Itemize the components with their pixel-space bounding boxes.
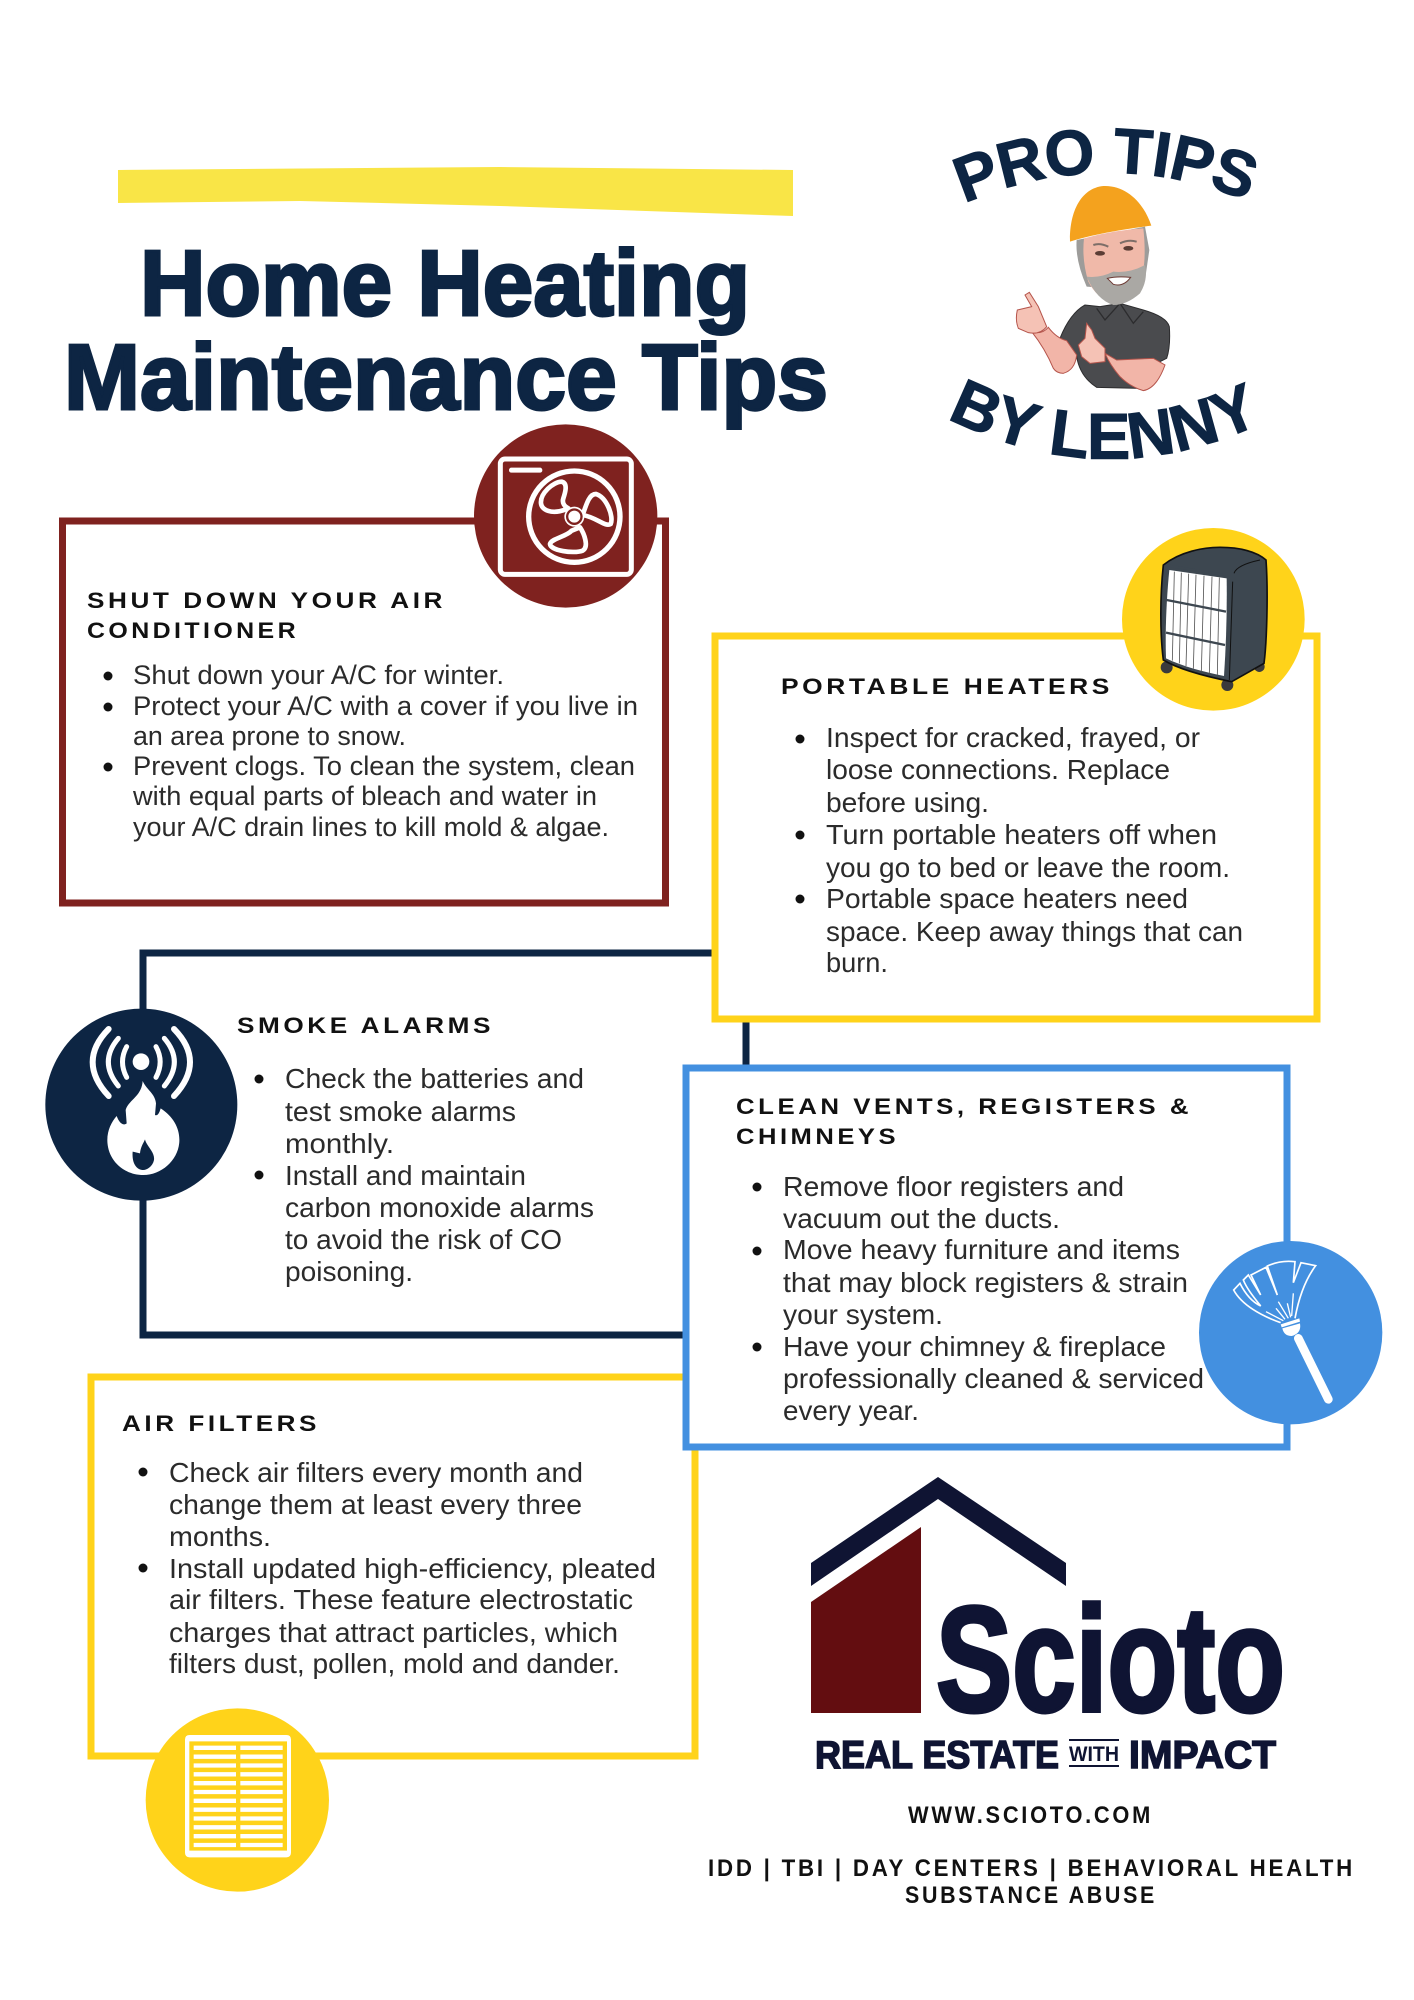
website url: WWW.SCIOTO.COM: [908, 1802, 1153, 1829]
bullet list: smoke alarms: to avoid the risk of CO: [285, 1224, 562, 1255]
bullet list: air conditioner: Shut down your A/C for winter.: [133, 660, 504, 690]
bullet list: smoke alarms: Check the batteries and: [285, 1063, 584, 1094]
bullet list: smoke alarms: poisoning.: [285, 1256, 413, 1287]
bullet list: air conditioner: Protect your A/C with a cover if you live in: [133, 691, 638, 721]
bullet list: portable heaters: before using.: [826, 787, 989, 818]
yellow highlight stroke: [118, 167, 793, 216]
bullet list: portable heaters: you go to bed or leave the room.: [826, 852, 1230, 883]
bullet list: smoke alarms: Install and maintain: [285, 1160, 526, 1191]
bullet list: air filters: Install updated high-efficiency, pleated: [169, 1553, 656, 1584]
bullet list: air filters: [138, 1457, 656, 1679]
bullet list: portable heaters: Inspect for cracked, frayed, or: [826, 722, 1200, 753]
heading: shut down your air conditioner: [87, 588, 446, 643]
logo: Scioto: [811, 1477, 1285, 1777]
heading: shut down your air conditioner: CONDITIONER: [87, 618, 299, 643]
bullet list: smoke alarms: monthly.: [285, 1128, 394, 1159]
service list: IDD | TBI | DAY CENTERS | BEHAVIORAL HEALTH: [708, 1855, 1355, 1882]
bullet list: smoke alarms: [254, 1063, 594, 1287]
title: Maintenance Tips: [64, 325, 828, 429]
title: [64, 231, 828, 429]
panel: air filters: [91, 1377, 695, 1892]
logo: pro tips by Lenny: [950, 128, 1256, 460]
icon: house roof and wall: [811, 1477, 1066, 1713]
panel: clean vents: [686, 1068, 1382, 1447]
tagline: IMPACT: [1129, 1734, 1276, 1777]
icon: portable heater: [1122, 528, 1305, 711]
bullet list: clean vents: your system.: [783, 1299, 943, 1330]
tagline: WITH: [1069, 1743, 1119, 1766]
panel: shut down your air conditioner: [62, 424, 666, 903]
service list: SUBSTANCE ABUSE: [905, 1882, 1157, 1909]
icon: feather duster: [1199, 1241, 1382, 1424]
bullet list: clean vents: Remove floor registers and: [783, 1171, 1124, 1202]
bullet list: clean vents: [752, 1171, 1204, 1426]
bullet list: air conditioner: Prevent clogs. To clean the system, clean: [133, 751, 635, 781]
heading: portable heaters: PORTABLE HEATERS: [781, 674, 1113, 699]
bullet list: air conditioner: your A/C drain lines to kill mold & algae.: [133, 812, 609, 842]
logo heading: by lenny: BY LENNY: [950, 378, 1248, 460]
service list: [708, 1855, 1355, 1909]
tagline: REAL ESTATE: [815, 1734, 1059, 1777]
icon: smoke alarm with flame: [45, 1009, 237, 1201]
logo heading: pro tips: PRO TIPS: [952, 128, 1256, 202]
brand name: Scioto: [936, 1575, 1285, 1743]
bullet list: portable heaters: Portable space heaters need: [826, 883, 1188, 914]
bullet list: portable heaters: [796, 722, 1243, 978]
bullet list: air conditioner: [104, 660, 638, 842]
bullet list: portable heaters: Turn portable heaters off when: [826, 819, 1217, 850]
bullet list: clean vents: vacuum out the ducts.: [783, 1203, 1060, 1234]
heading: shut down your air conditioner: SHUT DOWN YOUR AIR: [87, 588, 446, 613]
bullet list: clean vents: professionally cleaned & serviced: [783, 1363, 1204, 1394]
bullet list: portable heaters: space. Keep away things that can: [826, 916, 1243, 947]
panel: smoke alarms: [45, 953, 746, 1335]
bullet list: air filters: change them at least every three: [169, 1489, 582, 1520]
bullet list: smoke alarms: carbon monoxide alarms: [285, 1192, 594, 1223]
bullet list: smoke alarms: test smoke alarms: [285, 1096, 516, 1127]
bullet list: clean vents: every year.: [783, 1395, 919, 1426]
bullet list: air filters: charges that attract particles, which: [169, 1617, 618, 1648]
heading: smoke alarms: SMOKE ALARMS: [237, 1013, 494, 1038]
bullet list: air conditioner: an area prone to snow.: [133, 721, 406, 751]
bullet list: air filters: Check air filters every month and: [169, 1457, 583, 1488]
bullet list: air filters: filters dust, pollen, mold and dander.: [169, 1648, 620, 1679]
heading: air filters: AIR FILTERS: [122, 1411, 320, 1436]
icon: cartoon Lenny with hard hat: [1016, 186, 1170, 391]
bullet list: clean vents: Have your chimney & fireplace: [783, 1331, 1166, 1362]
heading: clean vents, registers and chimneys: CLEAN VENTS, REGISTERS &: [736, 1094, 1192, 1119]
title: Home Heating: [140, 231, 750, 335]
bullet list: air filters: months.: [169, 1521, 271, 1552]
icon: air conditioner fan: [474, 424, 657, 608]
icon: air filter: [146, 1708, 329, 1892]
bullet list: clean vents: Move heavy furniture and items: [783, 1234, 1180, 1265]
bullet list: air filters: air filters. These feature electrostatic: [169, 1584, 633, 1615]
panel: portable heaters: [715, 528, 1317, 1019]
heading: clean vents, registers and chimneys: CHIMNEYS: [736, 1124, 899, 1149]
bullet list: portable heaters: burn.: [826, 947, 888, 978]
heading: clean vents, registers and chimneys: [736, 1094, 1192, 1149]
bullet list: portable heaters: loose connections. Replace: [826, 754, 1170, 785]
bullet list: air conditioner: with equal parts of bleach and water in: [132, 781, 597, 811]
bullet list: clean vents: that may block registers & strain: [783, 1267, 1188, 1298]
tagline: [815, 1734, 1276, 1777]
